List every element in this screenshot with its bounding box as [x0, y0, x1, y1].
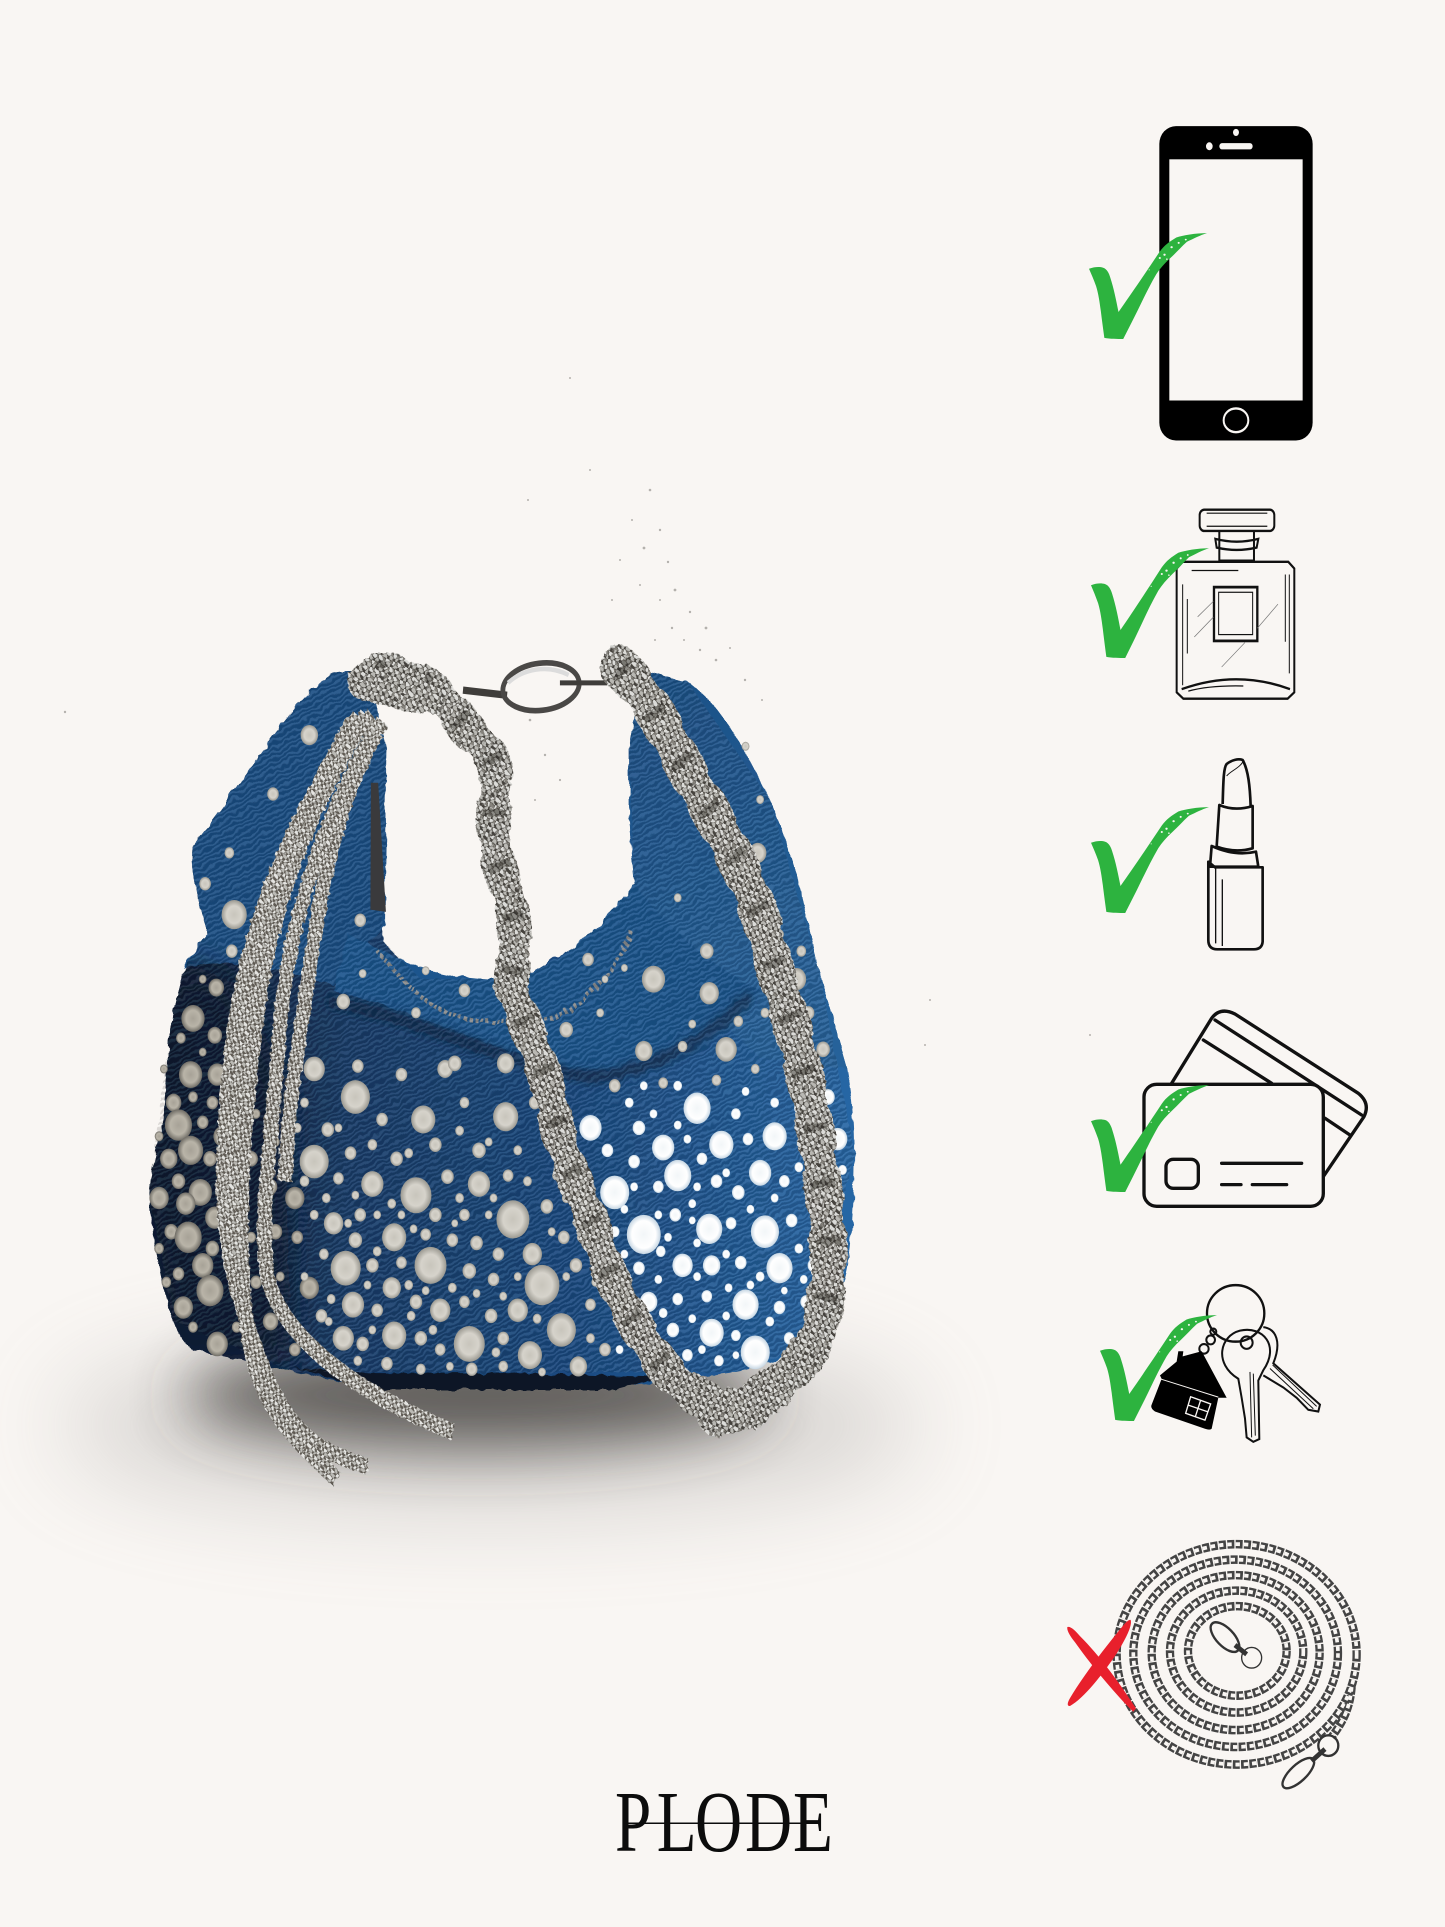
right upper flap — [629, 671, 847, 1069]
icon: perfume bottle — [1177, 510, 1294, 699]
inner clasp — [1206, 1617, 1262, 1668]
outer clasp — [1278, 1735, 1338, 1793]
logo: PLODE: PLODE — [615, 1773, 833, 1870]
check: cards — [1091, 1085, 1209, 1192]
left upper flap — [183, 671, 387, 985]
icon: keys with house fob — [1151, 1285, 1320, 1442]
icon: credit cards — [1144, 1011, 1366, 1206]
check: keys — [1100, 1315, 1217, 1421]
braided handle left — [363, 673, 755, 1409]
denim twill — [149, 671, 855, 1372]
chain coils — [1117, 1544, 1357, 1765]
check: phone — [1089, 233, 1207, 339]
bag body denim — [135, 671, 855, 1390]
bag ground shadow — [60, 1340, 920, 1510]
rhinestones upper flap — [199, 725, 830, 1093]
icon: lipstick — [1208, 759, 1263, 949]
dust specks around bag — [64, 377, 1091, 1046]
rhinestones bright side — [579, 1061, 847, 1369]
rhinestones dark side — [149, 975, 319, 1356]
handbag — [135, 659, 855, 1480]
rhinestones centre — [293, 1057, 611, 1376]
braided handle right — [620, 668, 828, 1414]
chain link centres — [1117, 1544, 1357, 1765]
zipper — [377, 929, 632, 1022]
metal zip tab — [370, 783, 386, 912]
dark left side blend — [135, 962, 290, 1361]
metal clasp — [463, 659, 613, 715]
front panel top shadow — [329, 996, 750, 1077]
underside — [295, 1368, 663, 1390]
fringe strands — [223, 715, 453, 1480]
cross mark: chain not included — [1067, 1620, 1136, 1712]
icon: coiled chain strap — [1117, 1544, 1357, 1793]
check: lipstick — [1091, 807, 1209, 913]
icon: phone — [1159, 126, 1313, 440]
pocket lip — [334, 884, 760, 1069]
check: perfume — [1091, 548, 1209, 658]
